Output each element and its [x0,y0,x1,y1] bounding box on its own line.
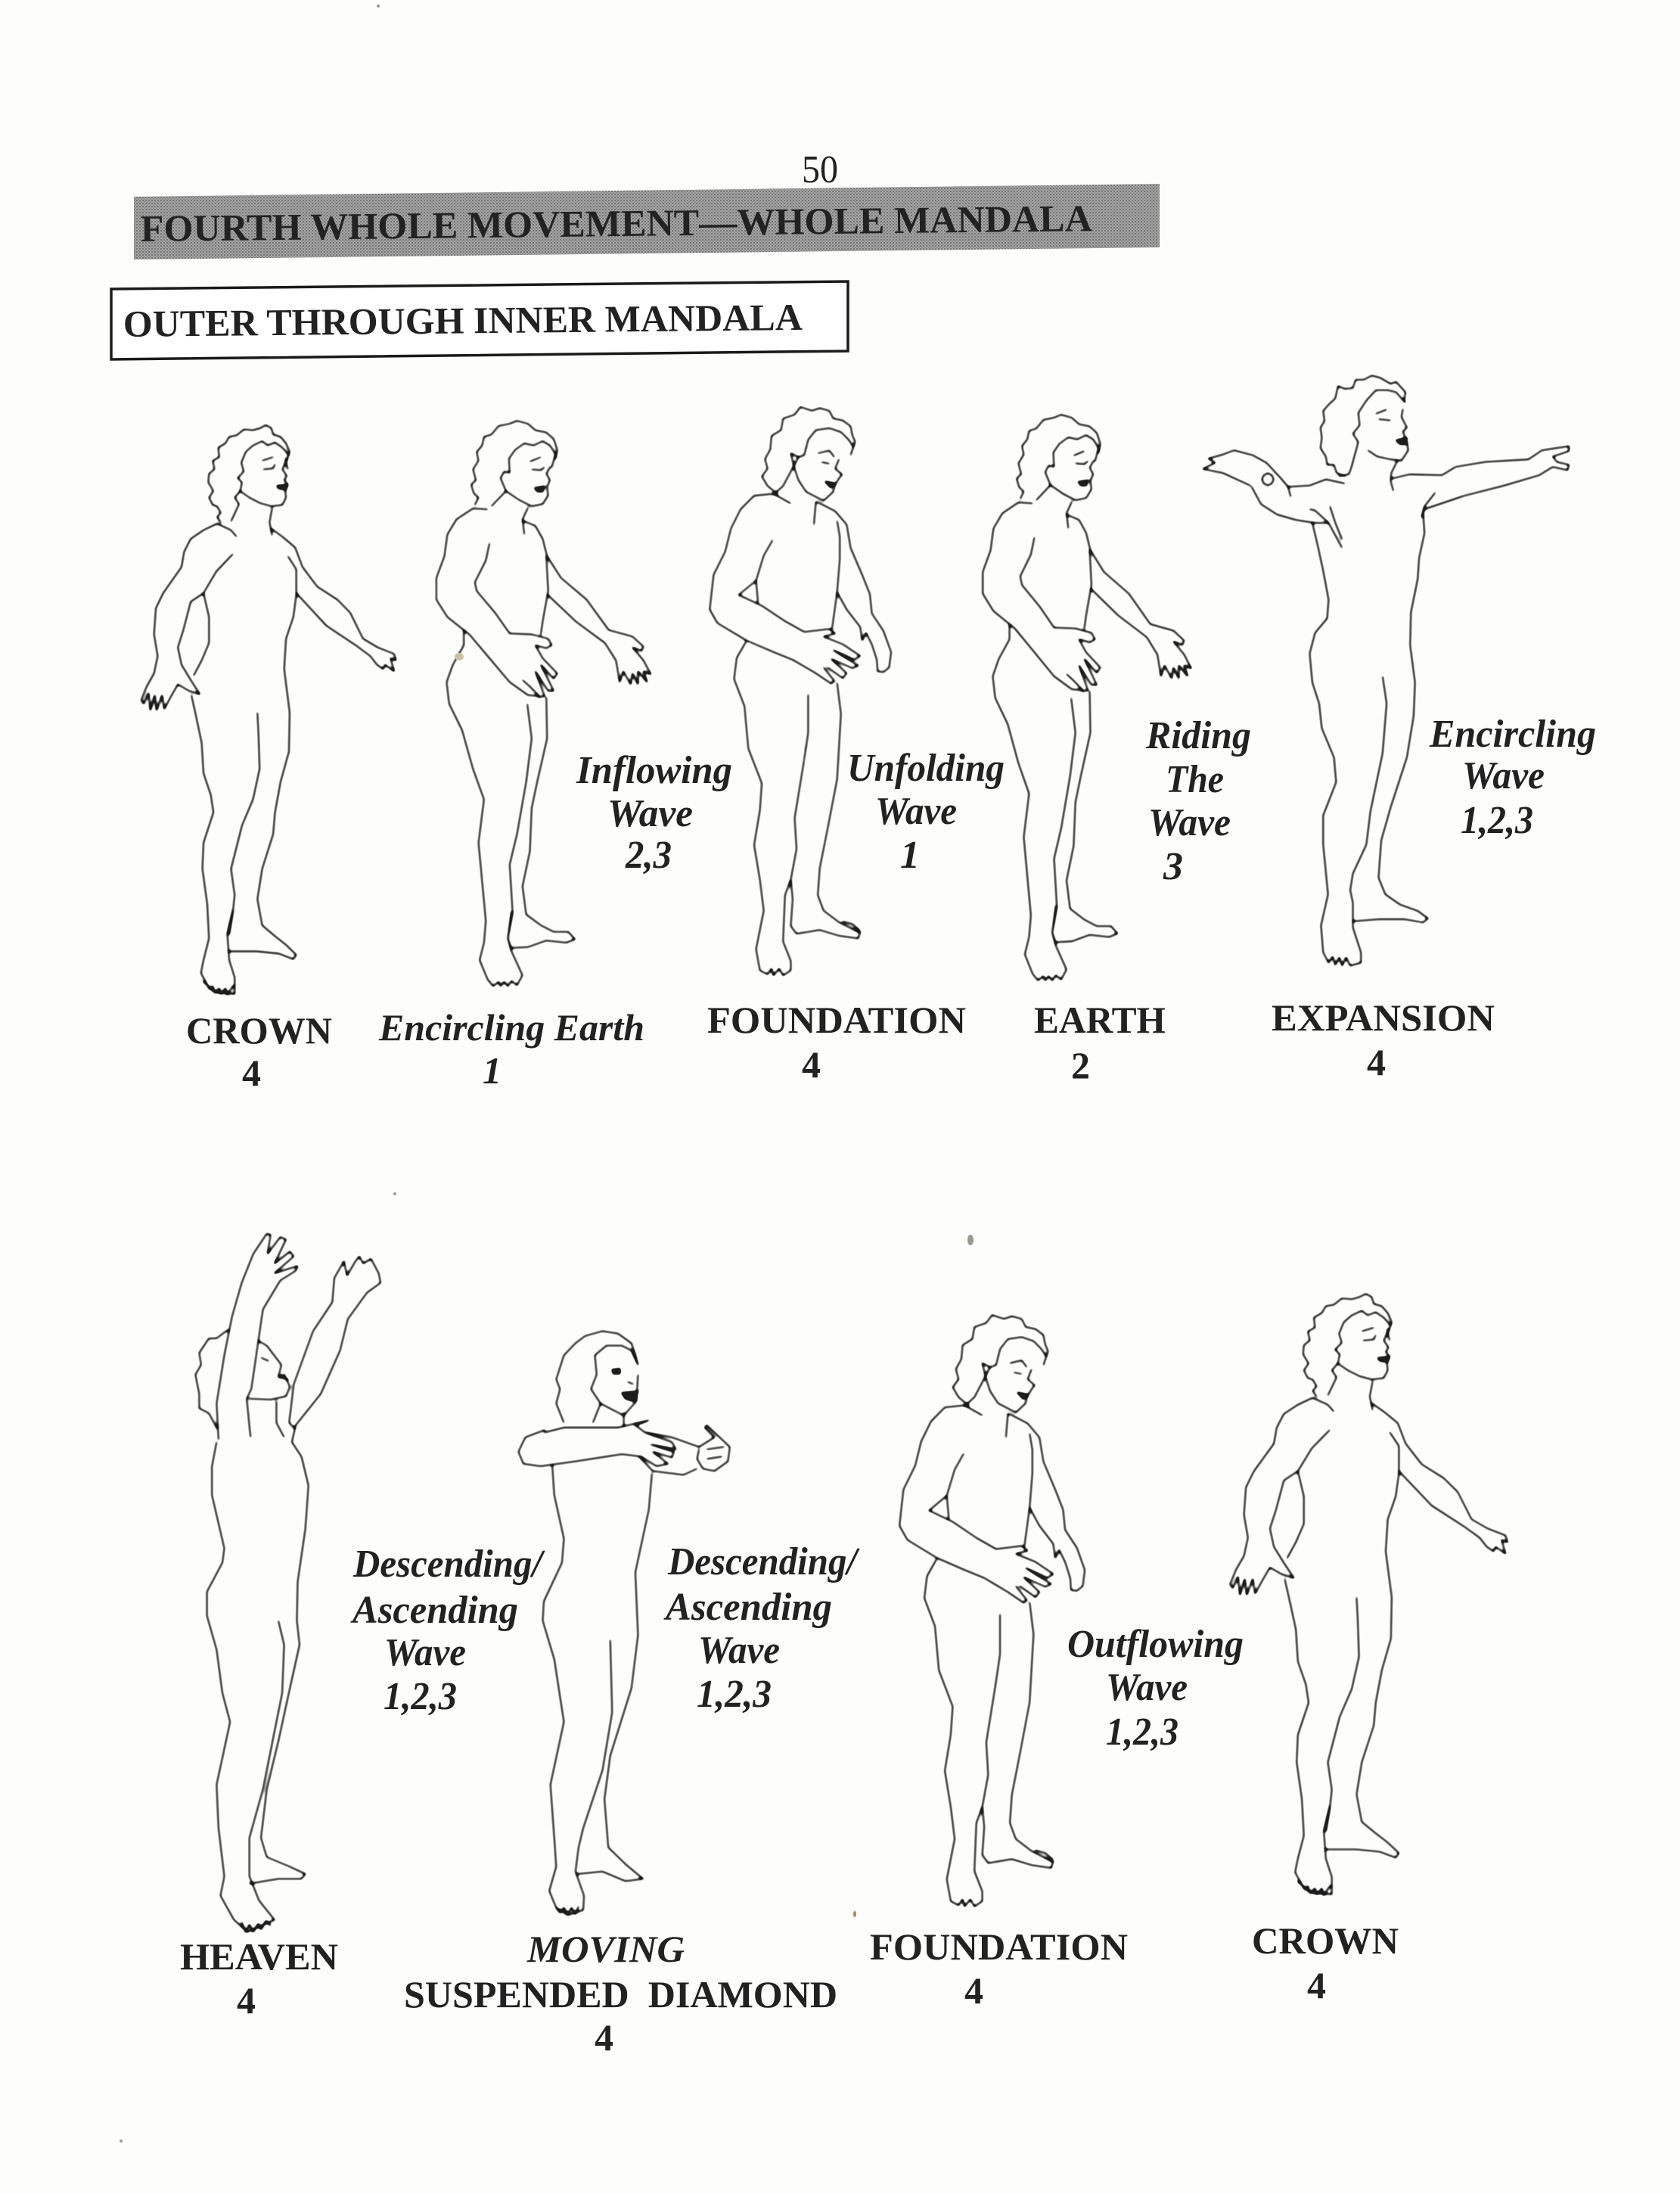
label: foundation, bottom row: FOUNDATION [870,1925,1128,1968]
label: heaven [180,1935,338,2022]
label: moving suspended diamond: MOVING [526,1928,685,1970]
text: inflowing wave: Inflowing [576,749,732,792]
label: earth: 2 [1071,1044,1090,1086]
label: crown, bottom row: CROWN [1252,1919,1399,1962]
label: encircling earth [378,1006,644,1092]
label: expansion: 4 [1367,1041,1386,1083]
text: encircling wave: 1,2,3 [1461,799,1533,842]
label: expansion: EXPANSION [1272,996,1495,1039]
label: heaven: HEAVEN [180,1935,338,1978]
text: outflowing wave [1067,1623,1244,1754]
text: descending ascending wave, left: Wave [384,1631,466,1674]
figure: expansion pose [1203,375,1569,965]
text: encircling wave: Encircling [1429,713,1596,756]
label: foundation: FOUNDATION [707,999,966,1041]
text: unfolding wave [847,747,1005,877]
text: unfolding wave: Unfolding [847,747,1005,790]
text: inflowing wave: Wave [607,792,693,835]
text: descending ascending wave, left: 1,2,3 [384,1675,457,1718]
banner: fourth whole movement: FOURTH WHOLE MOVEMENT—WHOLE MANDALA [141,197,1092,250]
subtitle box: outer through inner mandala [111,281,848,359]
text: encircling wave: Wave [1462,754,1545,797]
text: encircling wave [1429,713,1596,842]
label: heaven: 4 [237,1979,256,2022]
label: foundation, bottom row: 4 [964,1969,983,2012]
text: descending ascending wave, right: 1,2,3 [697,1673,772,1716]
specks on the scanned page [120,5,974,2143]
banner: fourth whole movement [134,184,1160,259]
figure: crown pose, bottom row [1230,1294,1508,1895]
text: descending ascending wave, right: Wave [698,1629,780,1672]
label: foundation [707,999,966,1086]
text: riding the wave: Wave [1148,801,1231,844]
text: inflowing wave: 2,3 [625,834,672,877]
label: foundation, bottom row [870,1925,1128,2012]
label: encircling earth: 1 [483,1049,502,1092]
figure: foundation pose, bottom row [899,1315,1085,1907]
page number: 50 [802,148,838,191]
text: unfolding wave: Wave [875,790,957,833]
text: inflowing wave [576,749,732,877]
text: riding the wave: 3 [1163,845,1183,888]
text: outflowing wave: 1,2,3 [1106,1711,1178,1754]
label: moving suspended diamond: SUSPENDED DIAMOND [404,1973,837,2015]
text: descending ascending wave, left: Ascending [350,1589,518,1632]
text: descending ascending wave, left: Descending/ [352,1543,545,1586]
subtitle box: outer through inner mandala: OUTER THROUGH INNER MANDALA [123,296,803,345]
text: descending ascending wave, right [663,1540,860,1716]
text: descending ascending wave, right: Ascending [663,1586,832,1629]
label: earth: EARTH [1034,999,1166,1041]
label: moving suspended diamond [404,1928,837,2059]
label: crown: 4 [242,1052,261,1094]
text: outflowing wave: Wave [1106,1666,1188,1709]
text: riding the wave: Riding [1145,714,1251,757]
text: descending ascending wave, left [350,1543,545,1718]
figure: foundation pose, top row [710,407,891,975]
text: unfolding wave: 1 [900,834,920,877]
label: moving suspended diamond: 4 [595,2016,613,2059]
text: outflowing wave: Outflowing [1067,1623,1244,1666]
text: riding the wave [1145,714,1251,888]
label: foundation: 4 [802,1043,821,1086]
figure: crown pose, top row [141,425,396,995]
figure: earth pose [983,415,1191,980]
label: encircling earth: Encircling Earth [378,1006,644,1049]
figure drawings [141,375,1569,1932]
figure: moving suspended diamond pose [518,1331,730,1915]
figure: heaven pose [195,1234,380,1932]
figure: encircling earth pose [436,421,651,986]
label: earth [1034,999,1166,1086]
text: riding the wave: The [1166,758,1224,801]
label: crown: CROWN [186,1009,332,1052]
label: crown, bottom row: 4 [1307,1964,1326,2006]
label: crown [186,1009,332,1094]
text: descending ascending wave, right: Descending/ [667,1540,860,1583]
label: crown, bottom row [1252,1919,1399,2006]
label: expansion [1272,996,1495,1083]
